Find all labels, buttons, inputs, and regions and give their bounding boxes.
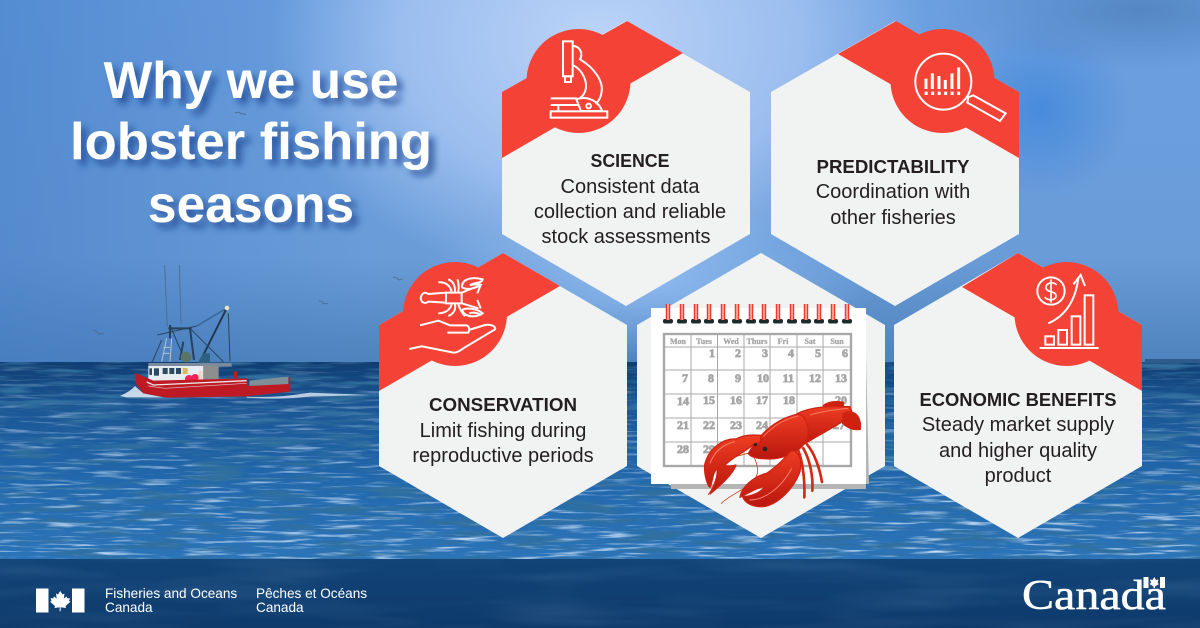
panel: science: [502, 21, 750, 306]
heading: conservation: CONSERVATION: [429, 394, 577, 415]
calendar dates: 22: [703, 418, 715, 432]
calendar dates: 13: [835, 371, 847, 385]
title: Why we use: [104, 51, 398, 109]
panel: conservation: [379, 253, 627, 538]
heading: predictability: PREDICTABILITY: [816, 156, 970, 177]
calendar dates: 16: [730, 393, 742, 407]
calendar spiral binding: [663, 304, 852, 324]
calendar dates: 1: [709, 346, 715, 360]
icon: rising chart with dollar: [1037, 275, 1099, 348]
title: [70, 51, 432, 233]
calendar dates: 24: [756, 418, 768, 432]
calendar weekday headers: [670, 337, 844, 346]
seabirds: [93, 112, 403, 334]
calendar weekday headers: Sat: [804, 337, 816, 346]
calendar dates: 6: [842, 346, 848, 360]
calendar weekday headers: Wed: [723, 337, 739, 346]
calendar dates: 8: [708, 371, 714, 385]
title: seasons: [148, 175, 354, 233]
calendar dates: 18: [783, 393, 795, 407]
calendar weekday headers: Fri: [778, 337, 789, 346]
calendar page: [651, 304, 869, 489]
calendar dates: 21: [677, 418, 689, 432]
calendar dates: 7: [682, 371, 688, 385]
text: economic benefits: and higher quality: [939, 440, 1097, 462]
calendar dates: 10: [757, 371, 769, 385]
calendar dates: 11: [783, 371, 794, 385]
calendar weekday headers: Mon: [670, 337, 687, 346]
government flag symbol: [36, 588, 84, 612]
calendar weekday headers: Sun: [830, 337, 844, 346]
Canada wordmark: Canada: [1022, 573, 1166, 619]
calendar grid: [664, 334, 851, 466]
background: sky: [0, 0, 1200, 400]
text: science: Consistent data: [561, 176, 700, 198]
icon: magnifying glass with chart: [915, 54, 1006, 121]
panel: predictability: [771, 21, 1019, 306]
calendar dates: 15: [703, 393, 715, 407]
calendar dates: 28: [677, 442, 689, 456]
text: economic benefits: product: [985, 465, 1052, 487]
department name: [105, 586, 367, 615]
calendar dates: 2: [735, 346, 741, 360]
department name: Fisheries and Oceans: [105, 586, 237, 601]
icon: microscope: [551, 41, 607, 118]
title: lobster fishing: [70, 112, 432, 170]
department name: Canada: [256, 600, 304, 615]
red ribbon: predictability: [838, 21, 1019, 158]
calendar dates: 3: [762, 346, 768, 360]
icon: lobster in a hand: [409, 278, 495, 353]
text: predictability: other fisheries: [830, 207, 956, 229]
calendar dates: 17: [756, 393, 768, 407]
footer band: [0, 559, 1200, 628]
calendar weekday headers: Thurs: [747, 337, 767, 346]
lobster illustration: [705, 402, 860, 507]
background: sea: [0, 359, 1200, 559]
calendar dates: 27: [833, 418, 845, 432]
department name: Pêches et Océans: [256, 586, 367, 601]
red ribbon: economic benefits: [962, 253, 1142, 391]
text: economic benefits: Steady market supply: [922, 414, 1114, 436]
calendar dates: 20: [835, 393, 847, 407]
text: predictability: Coordination with: [816, 181, 970, 203]
text: conservation: reproductive periods: [412, 445, 594, 467]
calendar dates: 4: [788, 346, 794, 360]
text: science: stock assessments: [542, 226, 710, 248]
text: conservation: Limit fishing during: [420, 420, 586, 442]
red ribbon: conservation: [379, 253, 560, 391]
panel: calendar with lobster: [637, 253, 885, 538]
calendar dates: 12: [809, 371, 821, 385]
calendar weekday headers: Tues: [696, 337, 712, 346]
calendar dates: 14: [677, 394, 689, 408]
department name: Canada: [105, 600, 153, 615]
heading: economic benefits: ECONOMIC BENEFITS: [920, 389, 1116, 410]
calendar dates: 5: [815, 346, 821, 360]
fishing boat: [120, 265, 370, 399]
calendar dates: [677, 346, 848, 456]
panel: economic benefits: [894, 253, 1142, 538]
red ribbon: science: [502, 21, 683, 158]
text: science: collection and reliable: [534, 201, 726, 223]
calendar dates: 9: [735, 371, 741, 385]
calendar dates: 23: [730, 418, 742, 432]
heading: science: SCIENCE: [590, 150, 670, 171]
calendar dates: 29: [703, 442, 715, 456]
